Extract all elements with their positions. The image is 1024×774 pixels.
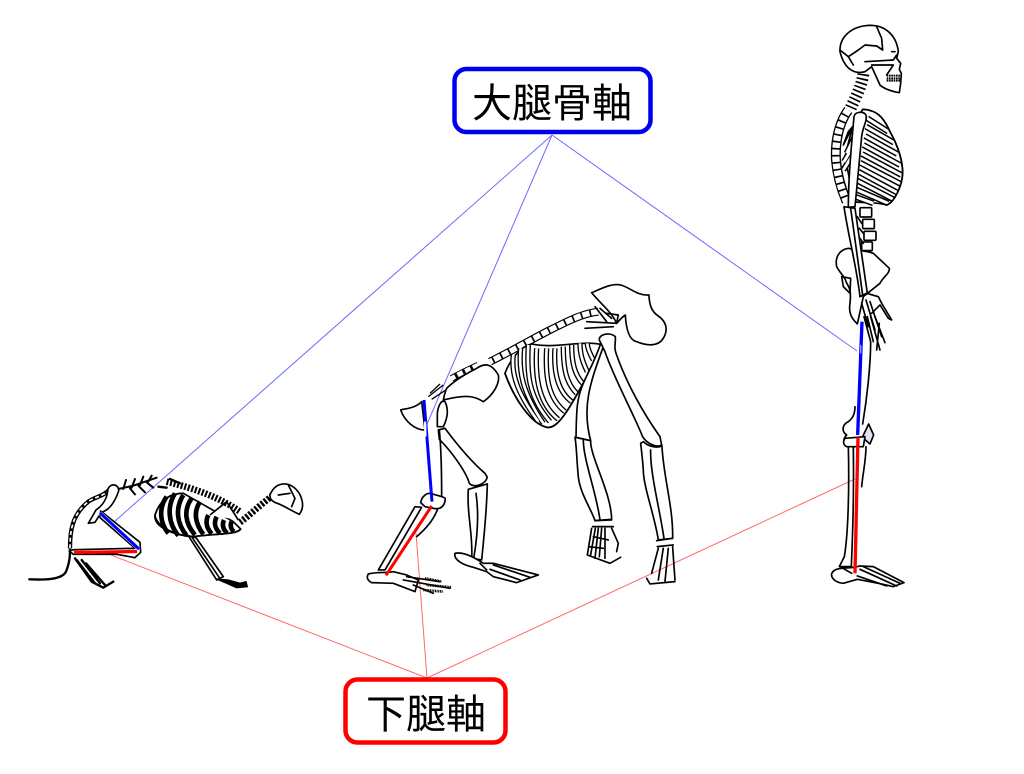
gorilla near hand bbox=[647, 538, 675, 584]
cat tibia axis bbox=[74, 545, 137, 559]
cat femur outline bbox=[69, 511, 141, 558]
gorilla hind leg, near bbox=[367, 430, 452, 593]
human skull bbox=[840, 25, 901, 93]
cat foreleg bbox=[188, 536, 247, 588]
human hand, upper part bbox=[860, 293, 892, 337]
human tibia axis bbox=[855, 437, 858, 573]
human lumbar vertebrae bbox=[857, 208, 876, 251]
human knee bbox=[844, 437, 865, 447]
cat skull bbox=[270, 484, 303, 514]
gorilla ribcage bbox=[505, 343, 603, 427]
gorilla skull bbox=[592, 285, 666, 345]
human tibia and fibula bbox=[844, 447, 866, 567]
human patella bbox=[862, 424, 874, 444]
gorilla tibia axis bbox=[386, 506, 432, 575]
gorilla spine bbox=[428, 312, 598, 399]
skeleton: gorilla bbox=[367, 285, 675, 593]
human femur bbox=[843, 317, 871, 446]
cat ribcage bbox=[155, 493, 241, 537]
human hand, lower part bbox=[867, 317, 885, 350]
skeleton: cat bbox=[29, 476, 303, 588]
human ribcage bbox=[843, 109, 903, 205]
cat tail and lumbar spine bbox=[29, 476, 180, 580]
label: femoral axis: 大腿骨軸 bbox=[472, 82, 632, 126]
gorilla scapula region bbox=[585, 307, 618, 328]
cat femur axis (blue) bbox=[100, 513, 139, 549]
gorilla far hand bbox=[587, 519, 621, 563]
label: tibial axis bbox=[346, 680, 506, 742]
label: tibial axis: 下腿軸 bbox=[366, 693, 486, 737]
human cervical and thoracic spine bbox=[836, 74, 863, 202]
gorilla pelvis bbox=[401, 365, 499, 430]
axis lines: femoral axis connectors bbox=[114, 135, 857, 522]
label: femoral axis bbox=[454, 69, 650, 132]
human arm bbox=[843, 112, 867, 297]
gorilla hind leg, far bbox=[438, 428, 538, 583]
cat thoracic spine and neck bbox=[167, 482, 273, 522]
gorilla near arm bbox=[599, 334, 673, 540]
human foot bbox=[832, 566, 904, 587]
human upper body bbox=[836, 25, 903, 337]
cat pelvis bbox=[88, 485, 119, 523]
cat hind foot bbox=[75, 558, 113, 588]
gorilla femur axis bbox=[424, 400, 432, 502]
human lower body bbox=[832, 317, 904, 587]
gorilla far arm bbox=[575, 343, 612, 521]
human pelvis bbox=[836, 248, 889, 324]
cat tibia axis (red) bbox=[74, 552, 137, 553]
human femur axis bbox=[858, 322, 862, 435]
skeleton: human bbox=[832, 25, 904, 587]
axis lines: tibial axis connectors bbox=[111, 479, 855, 678]
